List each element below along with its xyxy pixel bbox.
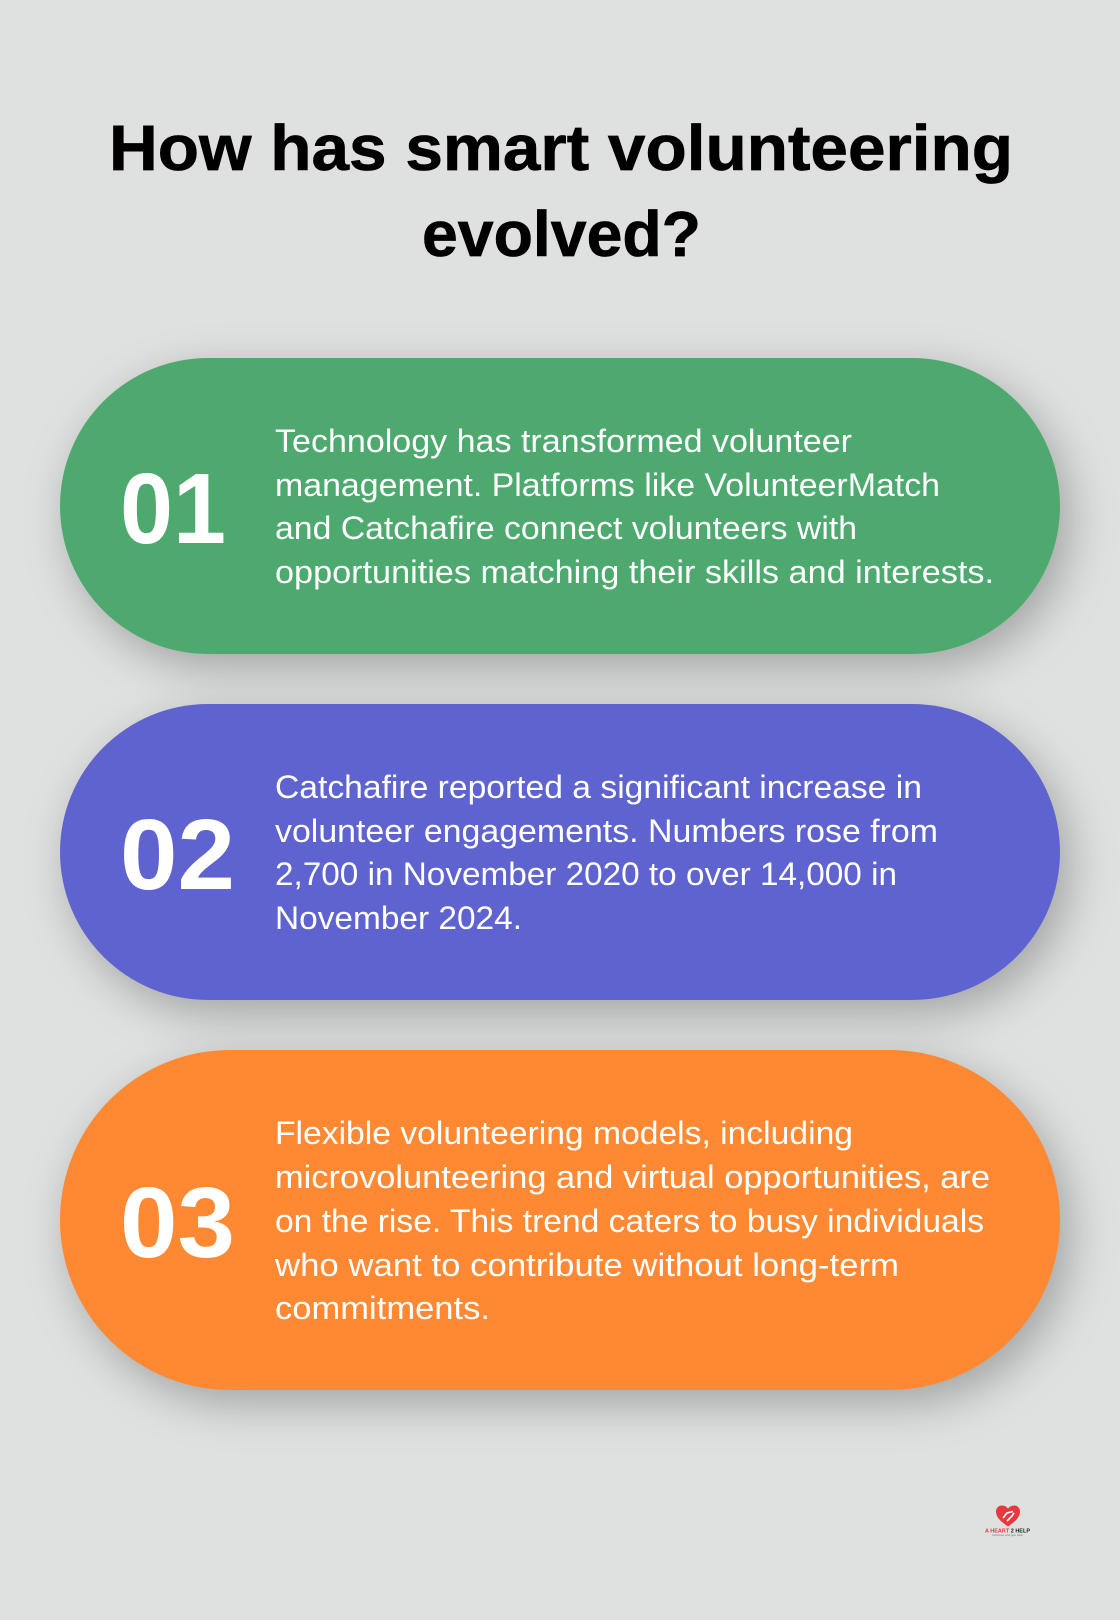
purple pill background: [60, 704, 1060, 1000]
icon: heart: [996, 1506, 1020, 1526]
number 01: 01: [120, 453, 226, 565]
text block: step 03: microvolunteering and virtual opportunities, are: [275, 1159, 990, 1195]
text block: step 02: Catchafire reported a significant increase in: [275, 769, 922, 805]
text block: step 02: November 2024.: [275, 900, 522, 936]
logo: A Heart 2 Help: [985, 1506, 1030, 1537]
panel: step 01: [60, 358, 1060, 654]
text block: step 02: 2,700 in November 2020 to over 14,000 in: [275, 856, 897, 892]
text block: step 03: who want to contribute without long-term: [274, 1247, 899, 1283]
panel: step 02: [60, 704, 1060, 1000]
text block: step 03: Flexible volunteering models, including: [275, 1115, 853, 1151]
panel: step 03: [60, 1050, 1060, 1390]
text block: step 03: [274, 1115, 990, 1326]
title: evolved?: [422, 198, 701, 270]
logo tagline: Volunteer and give back: [992, 1534, 1024, 1537]
text block: step 03: on the rise. This trend caters to busy individuals: [275, 1203, 984, 1239]
number 03: 03: [120, 1167, 235, 1279]
text block: step 01: Technology has transformed volunteer: [275, 423, 852, 459]
text block: step 03: commitments.: [275, 1290, 490, 1326]
text block: step 01: and Catchafire connect volunteers with: [275, 510, 857, 546]
text block: step 01: management. Platforms like VolunteerMatch: [275, 467, 940, 503]
logo wordmark: A HEART 2 HELP: [985, 1528, 1030, 1534]
number 02: 02: [120, 799, 235, 911]
text block: step 01: [275, 423, 994, 590]
green pill background: [60, 358, 1060, 654]
text block: step 02: volunteer engagements. Numbers rose from: [275, 813, 938, 849]
text block: step 01: opportunities matching their skills and interests.: [275, 554, 994, 590]
title: How has smart volunteering: [109, 112, 1013, 184]
text block: step 02: [275, 769, 938, 936]
title: [109, 112, 1013, 270]
orange pill background: [60, 1050, 1060, 1390]
